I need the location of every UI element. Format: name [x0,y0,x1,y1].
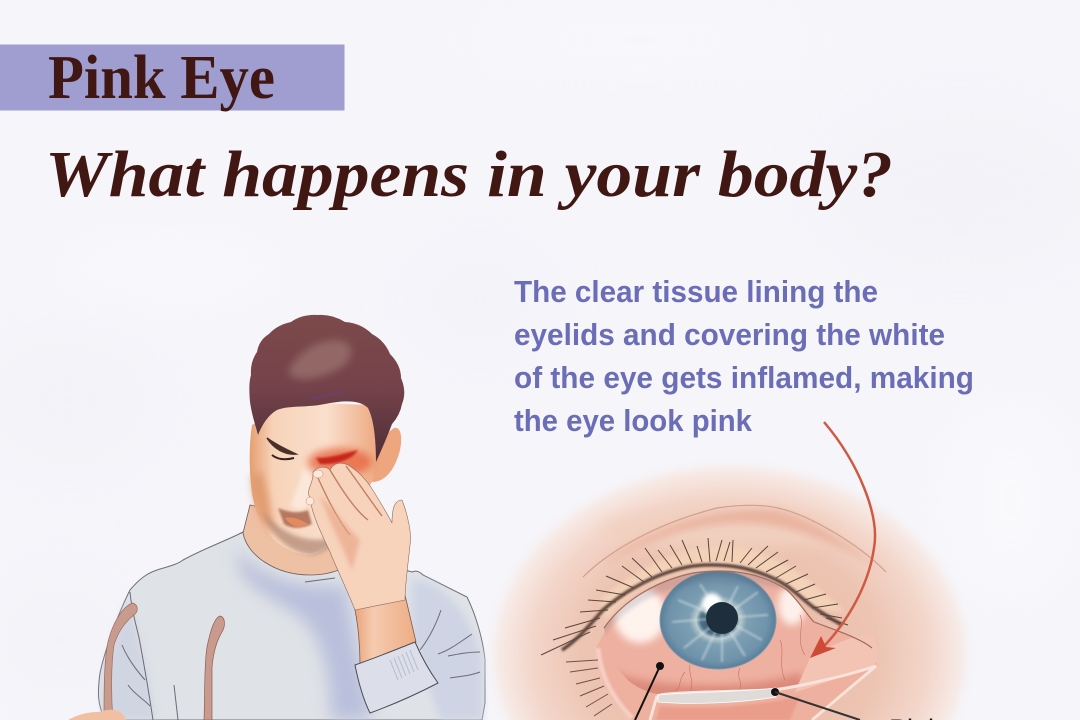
pointer arrow [810,422,875,658]
title: What happens in your body? [45,138,893,211]
face [250,402,378,555]
label band [0,44,344,110]
glasses temple left [104,603,137,720]
tear film [658,688,776,703]
fingernails [306,470,323,505]
iris [660,571,776,669]
knuckle shading [320,495,360,570]
description text: The clear tissue lining the [514,275,878,309]
hand [308,463,411,610]
highlight [702,593,722,615]
sweater folds [122,578,480,720]
lower lashes [566,660,612,716]
description text: eyelids and covering the white [514,318,945,352]
white of the eye, outer [778,585,806,625]
eyelid fold [583,505,886,577]
sclera [604,572,877,694]
lighter brow area [600,512,840,548]
description text: the eye look pink [514,404,752,438]
finger lines [318,466,382,535]
illustration: man rubbing his eye [68,315,485,720]
lower red tint [620,671,803,694]
conjunctiva fold [795,635,878,692]
nose shadow and mouth [278,508,312,528]
description text [514,275,974,438]
description text: of the eye gets inflamed, making [514,361,974,395]
eyelash band [562,565,842,650]
iris streaks [672,584,768,662]
right sleeve shading [412,580,482,720]
skin halo [480,455,980,720]
glasses temple right [204,616,224,720]
leader line: conjunctiva [635,662,664,720]
lower lid rim [650,666,876,720]
left sleeve shading [103,600,155,720]
left eyebrow [267,438,296,454]
white of the eye, inner [614,587,666,643]
leader line: eyelid lining [771,688,860,720]
upper shadow [604,572,786,635]
neck [243,505,345,575]
hair fringe tint [310,392,345,400]
sweater [98,532,485,720]
upper lid edge [604,571,872,648]
pupil [706,602,738,634]
lower lid tissue [656,696,800,720]
lid rim, pale [598,648,632,718]
sweater shadow under hand [236,545,372,720]
ear [372,428,401,482]
cuff ribs [390,650,418,680]
heading: Pink Eye: Pink Eye [48,44,275,112]
nose [291,468,313,509]
lower lid band [596,630,877,720]
blood vessels [675,615,805,692]
redness around eye [308,448,372,476]
upper lashes [541,538,848,655]
left eye [272,455,294,459]
cheek shade [252,472,275,535]
upper lid shade [600,545,845,620]
fold shadow [600,509,880,568]
irritated eye line [316,450,358,464]
forearm [350,590,416,664]
stubble [262,510,338,555]
lips [285,517,308,526]
hair highlight [288,340,351,379]
illustration: inflamed eye [480,455,980,720]
hair [249,315,404,462]
cuff [355,642,438,713]
lower hand [68,710,126,720]
